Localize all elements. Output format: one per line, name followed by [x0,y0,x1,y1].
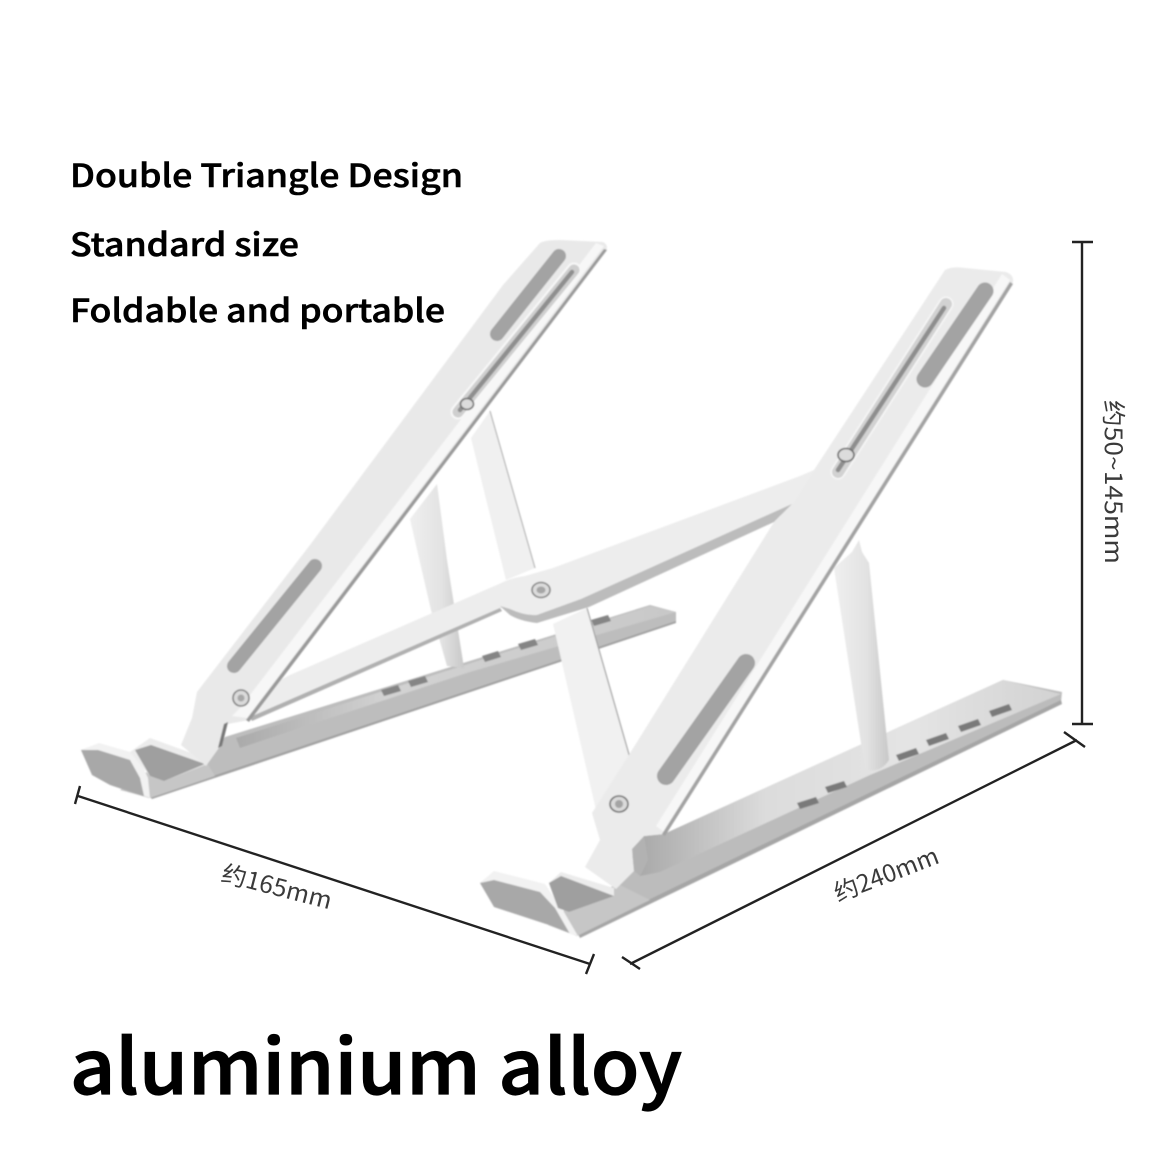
rear slot pin [460,398,474,410]
front slot [838,304,946,472]
height label: 约50~145mm [1098,400,1133,564]
rear stand top plate [181,240,607,766]
rear stand base rail [120,605,676,799]
front pad top [925,291,985,379]
text: double triangle design: Double Triangle Design [70,151,463,197]
text: foldable and portable: Foldable and portable [70,286,445,332]
front pad bottom [666,663,746,776]
rear pad bottom [234,566,315,666]
dimension: height [1072,242,1133,724]
front stand base rail [548,680,1062,938]
text: standard size: Standard size [70,220,299,266]
front strut [834,540,889,770]
cross arm with centre pivot [240,470,814,721]
rear slot [458,270,574,412]
middle strut upper [471,411,535,580]
centre pivot pin [532,582,550,598]
front slot pin [838,448,854,462]
rear hinge pin [233,690,249,706]
heading: feature list [70,151,463,332]
front rail vent holes [797,704,1012,809]
front stand top plate [585,267,1013,889]
rear strut behind [410,484,464,668]
middle strut lower [553,608,630,810]
width label: 约240mm [828,836,943,909]
rear pad top [497,256,559,334]
heading: aluminium alloy: aluminium alloy [70,1007,682,1116]
front hinge pin [610,796,628,812]
dimension: depth [75,786,594,974]
dimension: width [622,732,1085,969]
rear stand front lip [81,738,205,798]
depth label: 约165mm [218,854,336,916]
rear rail vent holes [381,615,611,696]
front stand front lip [480,871,614,936]
laptop stand illustration [81,240,1062,938]
